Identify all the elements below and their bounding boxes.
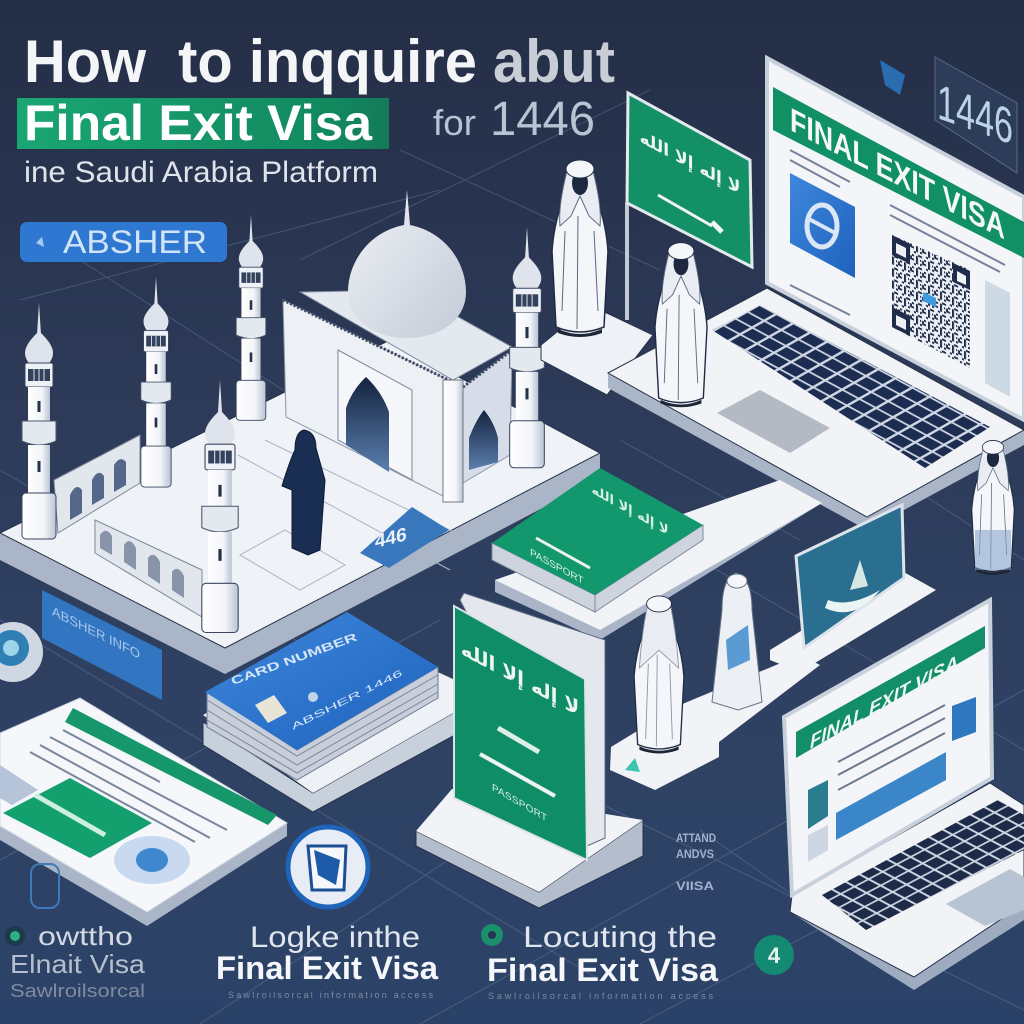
icon: app tile xyxy=(790,173,855,278)
figure right edge xyxy=(972,440,1014,575)
figures xyxy=(552,160,707,407)
keyboard xyxy=(822,800,1024,930)
caption: left: owtthо xyxy=(38,921,133,951)
blue sign xyxy=(42,590,162,700)
year label xyxy=(433,93,595,146)
caption: left: Elnait Visa xyxy=(10,949,146,979)
floor plan lines xyxy=(238,440,470,590)
panel: green passport on platform: PASSPORT xyxy=(530,547,584,587)
keyboard xyxy=(712,305,990,468)
panel: lower right laptop: FINAL EXIT VISA xyxy=(810,652,958,754)
icon: step 4 badge xyxy=(754,935,794,975)
panel: top laptop xyxy=(608,58,1024,530)
caption: locating: Locuting the xyxy=(523,921,717,954)
right arch xyxy=(469,410,498,470)
caption: left: Sawlroilsorcal xyxy=(10,981,145,1001)
icon: round login badge xyxy=(288,827,368,907)
panel: large passport: لا إله إلا الله xyxy=(461,636,579,721)
caption: log in: Sawlroilsorcal information access xyxy=(228,990,434,1000)
arcade wall front xyxy=(95,520,202,617)
figure in dark robe xyxy=(282,430,325,555)
trackpad xyxy=(946,869,1024,926)
flag board xyxy=(627,93,752,320)
small label text xyxy=(676,831,716,893)
year label: for xyxy=(433,102,476,143)
caption: locating: Final Exit Visa xyxy=(487,952,718,988)
subtitle: ine Saudi Arabia Platform xyxy=(24,156,378,189)
panel: large passport xyxy=(416,593,643,908)
small label text: ANDVS xyxy=(676,847,714,861)
panel: blue card stack: CARD NUMBER xyxy=(229,630,359,687)
panel: mosque platform xyxy=(0,190,600,674)
caption: log in xyxy=(216,921,438,1000)
icon: small outline tag xyxy=(31,864,59,908)
panel: large passport: PASSPORT xyxy=(492,782,547,825)
Absher badge: ABSHER xyxy=(63,224,207,260)
caption: log in: Final Exit Visa xyxy=(216,950,438,986)
screen xyxy=(767,58,1024,420)
Absher badge xyxy=(20,222,227,262)
panel: man platform xyxy=(541,305,653,395)
caption: log in: Logke inthe xyxy=(250,921,420,954)
title: How to inqquire abut xyxy=(24,28,615,95)
small label text: ATTAND xyxy=(676,831,716,845)
caption: locating: Sawlroilsorcal information access xyxy=(488,991,714,1001)
screen banner xyxy=(773,87,1024,258)
panel: lower left document xyxy=(0,698,287,926)
year label: 1446 xyxy=(490,93,595,146)
screen side image xyxy=(985,280,1010,397)
panel: lower right laptop xyxy=(784,600,1024,990)
blue sign: ABSHER INFO xyxy=(52,604,140,662)
icon: minarets xyxy=(22,215,544,633)
QR code xyxy=(892,235,970,368)
small badge 446 xyxy=(360,507,449,568)
panel: green passport on platform xyxy=(492,468,822,640)
green banner: Final Exit Visa: Final Exit Visa xyxy=(24,95,373,151)
caption: locating xyxy=(481,921,718,1001)
trackpad xyxy=(717,390,830,453)
figure on platform xyxy=(610,573,820,790)
1446 floating panel xyxy=(880,57,1017,173)
dome xyxy=(348,190,466,338)
tablet with crescent xyxy=(770,505,936,672)
caption: left xyxy=(5,921,146,1001)
arcade wall left xyxy=(54,435,140,533)
small badge 446: 446 xyxy=(375,524,407,553)
screen banner xyxy=(796,626,985,758)
icon: round device at left edge xyxy=(0,622,43,682)
main arch xyxy=(346,377,389,472)
mosque building xyxy=(283,190,512,502)
panel: green passport on platform: لا إله إلا الله xyxy=(591,482,669,539)
panel: blue card stack: ABSHER 1446 xyxy=(290,668,404,732)
screen xyxy=(784,600,992,895)
panel: blue card stack xyxy=(203,612,455,812)
small label text: VIISA xyxy=(676,879,714,893)
flag board: لا إله إلا الله xyxy=(640,127,740,199)
icon: step 4 badge: 4 xyxy=(768,943,781,968)
